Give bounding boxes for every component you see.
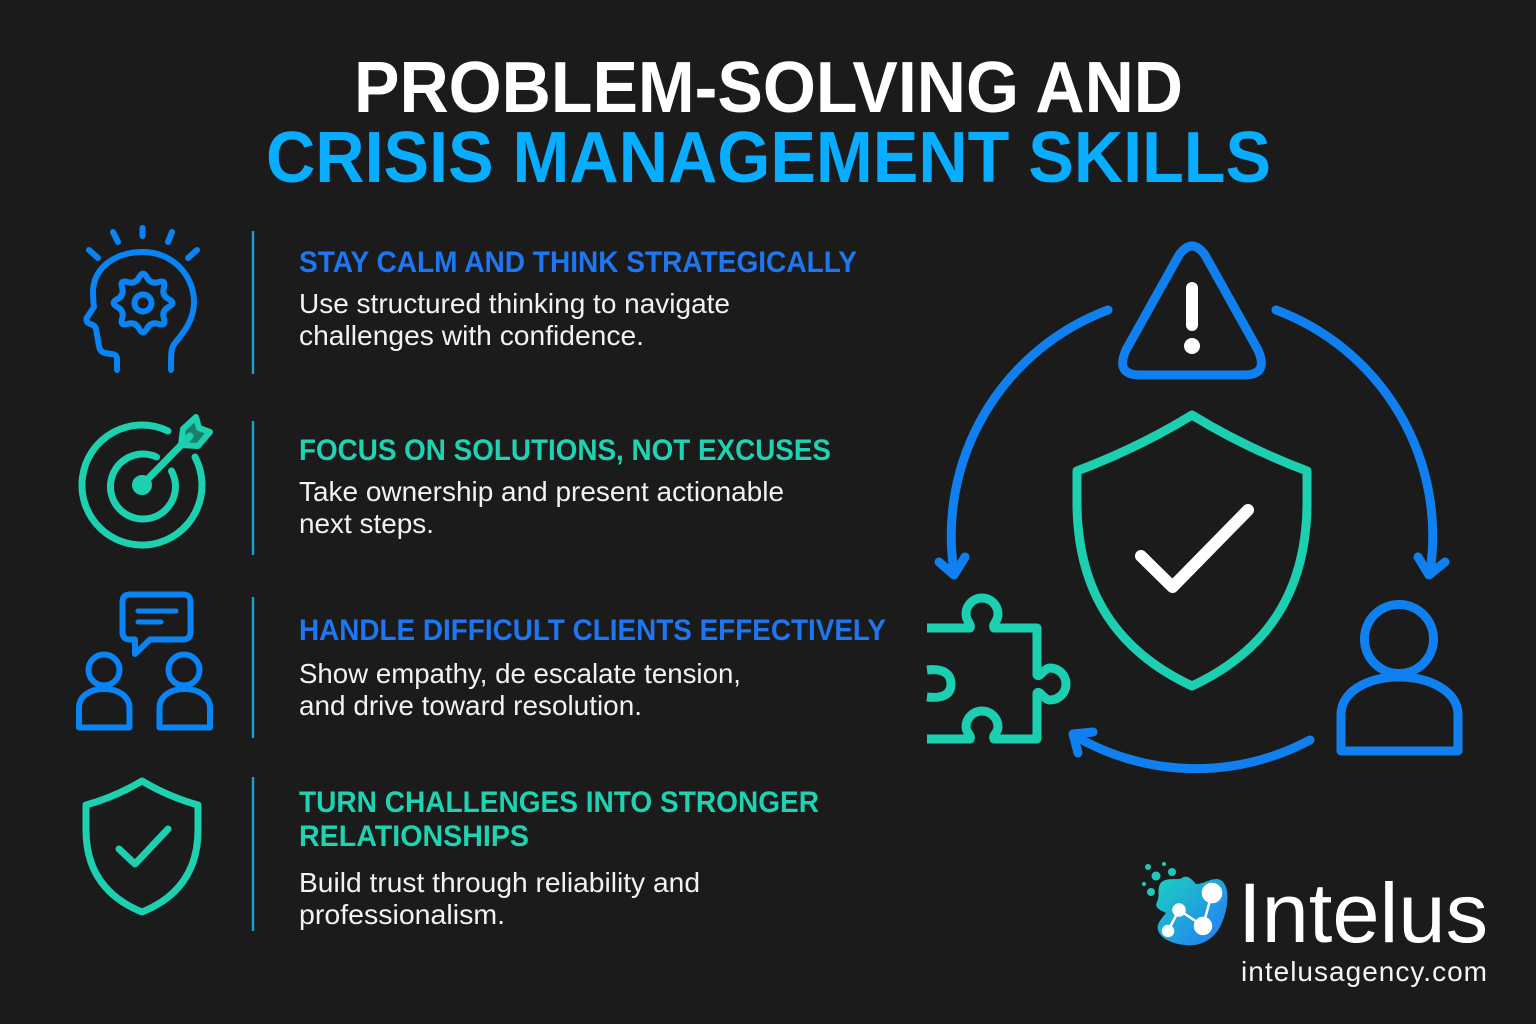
text block: stay calm	[299, 246, 857, 351]
text block: handle difficult clients	[299, 614, 886, 721]
icon: person	[1341, 604, 1458, 751]
text block: turn challenges: RELATIONSHIPS	[299, 820, 529, 853]
icon: central shield	[1077, 415, 1307, 686]
icon: puzzle piece	[927, 598, 1066, 739]
text block: turn challenges: Build trust through reliability and	[299, 867, 700, 898]
text block: handle difficult clients: Show empathy, de escalate tension,	[299, 658, 741, 689]
icon: two people talking	[79, 594, 210, 728]
text block: focus on solutions: next steps.	[299, 508, 434, 539]
arrow: person to puzzle	[1073, 732, 1310, 769]
icon: shield with check	[86, 781, 198, 912]
title	[266, 48, 1271, 198]
arrow: warning to puzzle	[939, 310, 1108, 575]
logo wordmark: Intelus	[1238, 866, 1488, 960]
arrow: warning to person	[1276, 310, 1445, 575]
text block: turn challenges: TURN CHALLENGES INTO STRONGER	[299, 786, 819, 819]
text block: stay calm: Use structured thinking to navigate	[299, 288, 730, 319]
text block: handle difficult clients: HANDLE DIFFICULT CLIENTS EFFECTIVELY	[299, 614, 886, 647]
text block: focus on solutions: Take ownership and present actionable	[299, 476, 784, 507]
logo mark	[1142, 862, 1227, 945]
text block: handle difficult clients: and drive toward resolution.	[299, 690, 642, 721]
text block: turn challenges: professionalism.	[299, 899, 505, 930]
title: PROBLEM-SOLVING AND	[354, 48, 1183, 128]
text block: stay calm: challenges with confidence.	[299, 320, 644, 351]
icon: warning triangle	[1123, 246, 1261, 375]
website url: intelusagency.com	[1241, 956, 1487, 987]
icon: target with arrow	[82, 417, 210, 545]
title: CRISIS MANAGEMENT SKILLS	[266, 118, 1271, 198]
text block: focus on solutions: FOCUS ON SOLUTIONS, NOT EXCUSES	[299, 434, 831, 467]
text block: focus on solutions	[299, 434, 831, 539]
diagram: crisis cycle	[927, 246, 1458, 769]
text block: stay calm: STAY CALM AND THINK STRATEGICALLY	[299, 246, 857, 279]
text block: turn challenges	[299, 786, 819, 930]
logo: Intelus	[1142, 862, 1488, 987]
icon: head with gear	[86, 228, 197, 370]
